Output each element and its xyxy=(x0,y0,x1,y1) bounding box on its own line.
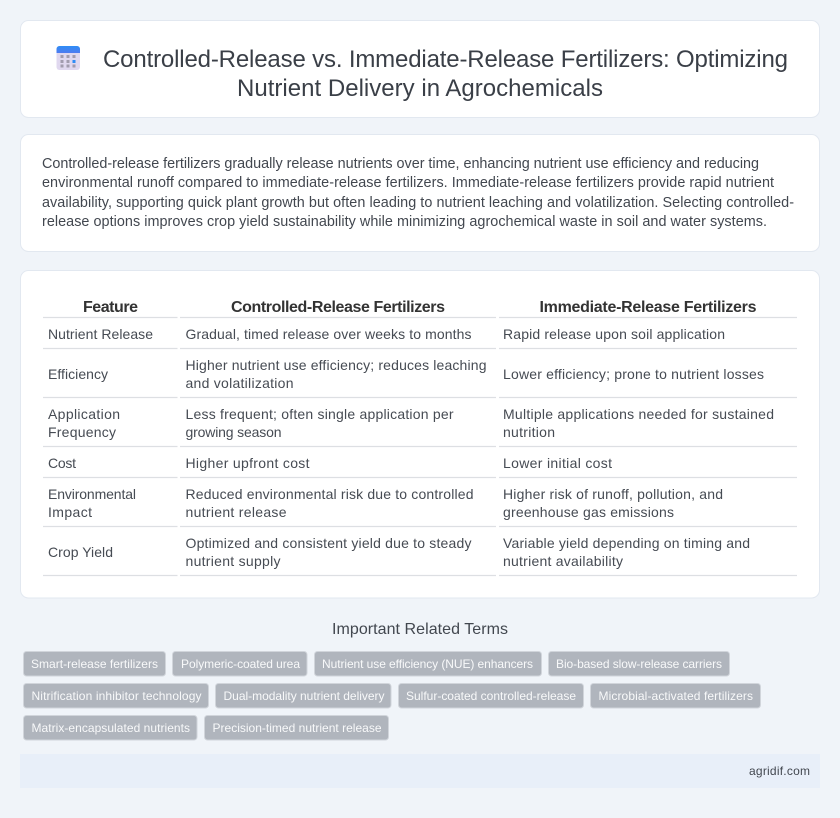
row: environmental impact: Reduced environmental risk due to controlled xyxy=(186,486,474,502)
row: cost: Lower initial cost xyxy=(503,455,612,471)
table header: Controlled-Release Fertilizers xyxy=(231,299,445,316)
row: environmental impact: nutrient release xyxy=(186,504,287,520)
heading: important related terms: Important Related Terms xyxy=(332,621,508,638)
title: Controlled-Release vs. Immediate-Release Fertilizers: Optimizing xyxy=(103,46,788,73)
panel: summary text: Controlled-release fertilizers gradually release nutrients over time, enhancing nutrient use efficiency and reducing xyxy=(42,156,759,172)
tag: Nutrient use efficiency (NUE) enhancers xyxy=(322,657,533,671)
table header: Feature xyxy=(83,299,138,316)
row: cost: Cost xyxy=(48,455,76,471)
row: nutrient release: Nutrient Release xyxy=(48,326,153,342)
row: application frequency: nutrition xyxy=(503,424,555,440)
row: application frequency: Multiple applications needed for sustained xyxy=(503,406,774,422)
tag xyxy=(314,652,542,676)
tag: Polymeric-coated urea xyxy=(181,657,300,671)
panel: comparison table xyxy=(20,270,820,598)
row: efficiency: Efficiency xyxy=(48,366,108,382)
panel: summary text xyxy=(20,134,820,252)
tag xyxy=(24,684,208,708)
title xyxy=(103,46,788,102)
row: crop yield xyxy=(48,535,750,569)
tag: Precision-timed nutrient release xyxy=(212,721,382,735)
tag list xyxy=(24,652,760,740)
tag xyxy=(24,652,166,676)
panel: summary text: environmental runoff compared to immediate-release fertilizers. Immediate-release fertilizers provide rapid nutrient xyxy=(42,175,774,191)
tag: Smart-release fertilizers xyxy=(31,657,158,671)
tag: Microbial-activated fertilizers xyxy=(598,689,753,703)
row: cost xyxy=(48,455,612,471)
footer bar xyxy=(20,754,820,788)
row: application frequency: Less frequent; often single application per xyxy=(186,406,454,422)
row: crop yield: nutrient supply xyxy=(186,553,280,569)
tag xyxy=(590,684,760,708)
tag xyxy=(398,684,584,708)
panel: title header xyxy=(20,20,820,118)
row: efficiency xyxy=(48,357,764,391)
row: crop yield: Crop Yield xyxy=(48,544,113,560)
row: efficiency: and volatilization xyxy=(186,375,294,391)
row: environmental impact: Environmental xyxy=(48,486,136,502)
row: environmental impact: Higher risk of runoff, pollution, and xyxy=(503,486,723,502)
tag: Nitrification inhibitor technology xyxy=(32,689,202,703)
row: environmental impact: greenhouse gas emissions xyxy=(503,504,674,520)
footer bar: agridif.com xyxy=(749,764,810,778)
panel: summary text: availability, supporting quick plant growth but often leading to nutrient leaching and volatilization. Selecting controlled- xyxy=(42,195,794,211)
row: crop yield: nutrient availability xyxy=(503,553,623,569)
title: Nutrient Delivery in Agrochemicals xyxy=(237,75,603,102)
tag xyxy=(172,652,307,676)
row: crop yield: Optimized and consistent yield due to steady xyxy=(186,535,472,551)
tag: Sulfur-coated controlled-release xyxy=(406,689,576,703)
table header xyxy=(83,299,757,316)
row: cost: Higher upfront cost xyxy=(186,455,310,471)
tag xyxy=(24,716,197,740)
row: nutrient release xyxy=(48,326,725,342)
tag xyxy=(216,684,391,708)
row: application frequency: Frequency xyxy=(48,424,116,440)
row: nutrient release: Rapid release upon soil application xyxy=(503,326,725,342)
panel: summary text: release options improves crop yield sustainability while minimizing agrochemical waste in soil and water systems. xyxy=(42,214,767,230)
tag: Matrix-encapsulated nutrients xyxy=(32,721,190,735)
row: efficiency: Lower efficiency; prone to nutrient losses xyxy=(503,366,764,382)
tag: Dual-modality nutrient delivery xyxy=(224,689,384,703)
tag: Bio-based slow-release carriers xyxy=(556,657,722,671)
row: efficiency: Higher nutrient use efficiency; reduces leaching xyxy=(186,357,486,373)
row: nutrient release: Gradual, timed release over weeks to months xyxy=(186,326,472,342)
row: crop yield: Variable yield depending on timing and xyxy=(503,535,750,551)
tag xyxy=(204,716,388,740)
row: environmental impact xyxy=(48,486,723,520)
tag xyxy=(548,652,730,676)
row: environmental impact: Impact xyxy=(48,504,92,520)
table header: Immediate-Release Fertilizers xyxy=(540,299,757,316)
row: application frequency xyxy=(48,406,774,440)
icon: calendar xyxy=(56,46,80,70)
row: application frequency: Application xyxy=(48,406,120,422)
row: application frequency: growing season xyxy=(186,424,282,440)
